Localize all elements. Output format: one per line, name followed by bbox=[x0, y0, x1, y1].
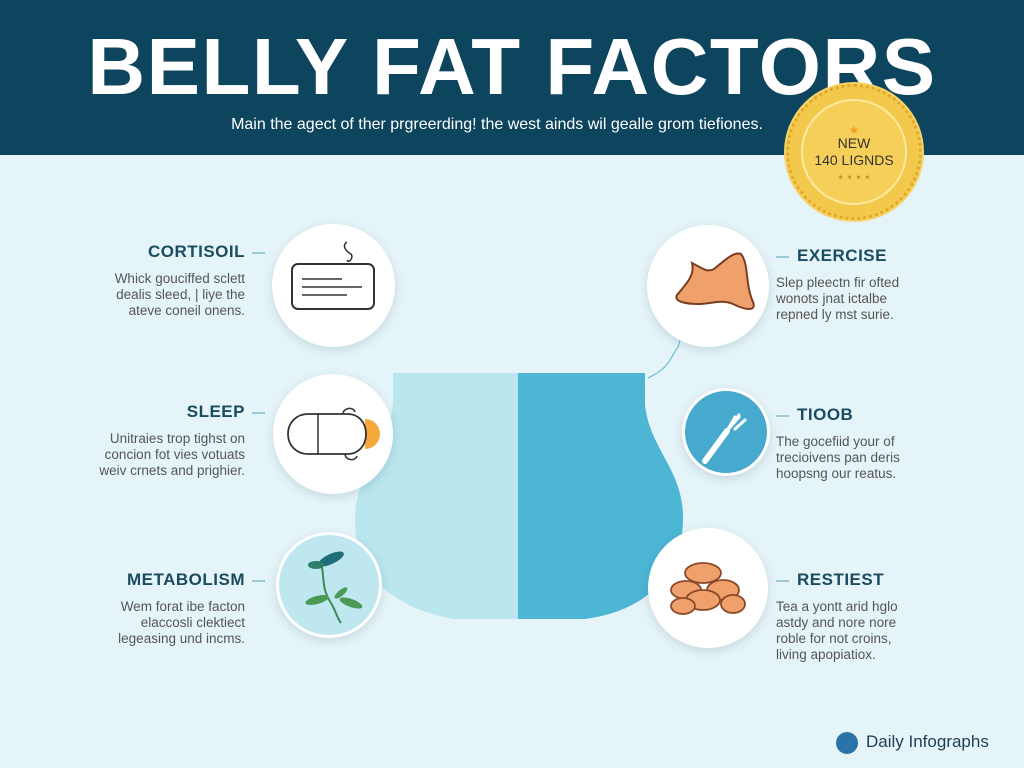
icon: fork bbox=[682, 388, 770, 476]
footer logo: Daily Infographs bbox=[866, 732, 989, 751]
panel: exercise text: repned ly mst surie. bbox=[776, 307, 894, 322]
panel: sleep text: weiv crnets and prighier. bbox=[99, 463, 245, 478]
title: BELLY FAT FACTORS bbox=[87, 22, 937, 111]
panel: cortisol text: Whick gouciffed sclett bbox=[115, 271, 245, 286]
icon: beans bbox=[648, 528, 768, 648]
panel: cortisol text: CORTISOIL bbox=[148, 242, 245, 261]
panel: food text: trecioivens pan deris bbox=[776, 450, 900, 465]
badge: ✶ ✶ ✶ ✶ bbox=[837, 173, 871, 182]
panel: sleep text: Unitraies trop tighst on bbox=[110, 431, 245, 446]
panel: metabolism text: METABOLISM bbox=[127, 570, 245, 589]
icon: plant bbox=[276, 532, 382, 638]
panel: sleep text: concion fot vies votuats bbox=[105, 447, 245, 462]
icon: exercise blob bbox=[647, 225, 769, 347]
panel: exercise text: Slep pleectn fir ofted bbox=[776, 275, 899, 290]
footer logo bbox=[836, 732, 989, 754]
badge bbox=[786, 84, 922, 220]
icon: sleep bbox=[273, 374, 393, 494]
panel: sleep text bbox=[99, 402, 265, 478]
panel: metabolism text: legeasing und incms. bbox=[118, 631, 245, 646]
panel: restiest text: living apopiatiox. bbox=[776, 647, 876, 662]
panel: exercise text: wonots jnat ictalbe bbox=[776, 291, 887, 306]
panel: restiest text: roble for not croins, bbox=[776, 631, 892, 646]
panel: cortisol text bbox=[114, 242, 265, 318]
panel: restiest text bbox=[776, 570, 898, 662]
icon: cortisol card bbox=[272, 224, 395, 347]
panel: sleep text: SLEEP bbox=[187, 402, 245, 421]
panel: restiest text: RESTIEST bbox=[797, 570, 884, 589]
panel: exercise text: EXERCISE bbox=[797, 246, 887, 265]
header band bbox=[0, 0, 1024, 155]
badge: 140 LIGNDS bbox=[814, 152, 894, 168]
panel: restiest text: Tea a yontt arid hglo bbox=[776, 599, 898, 614]
panel: metabolism text: Wem forat ibe facton bbox=[121, 599, 245, 614]
panel: restiest text: astdy and nore nore bbox=[776, 615, 896, 630]
panel: metabolism text: elaccosli clektiect bbox=[141, 615, 245, 630]
panel: food text bbox=[776, 405, 900, 481]
panel: exercise text bbox=[776, 246, 899, 322]
panel: metabolism text bbox=[118, 570, 265, 646]
badge: NEW bbox=[838, 135, 870, 151]
panel: cortisol text: dealis sleed, | liye the bbox=[116, 287, 245, 302]
panel: food text: The gocefiid your of bbox=[776, 434, 895, 449]
panel: food text: TIOOB bbox=[797, 405, 853, 424]
badge: ★ bbox=[849, 123, 859, 137]
panel: food text: hoopsng our reatus. bbox=[776, 466, 896, 481]
subtitle: Main the agect of ther prgreerding! the west ainds wil gealle grom tiefiones. bbox=[231, 116, 763, 133]
panel: cortisol text: ateve coneil onens. bbox=[129, 303, 245, 318]
